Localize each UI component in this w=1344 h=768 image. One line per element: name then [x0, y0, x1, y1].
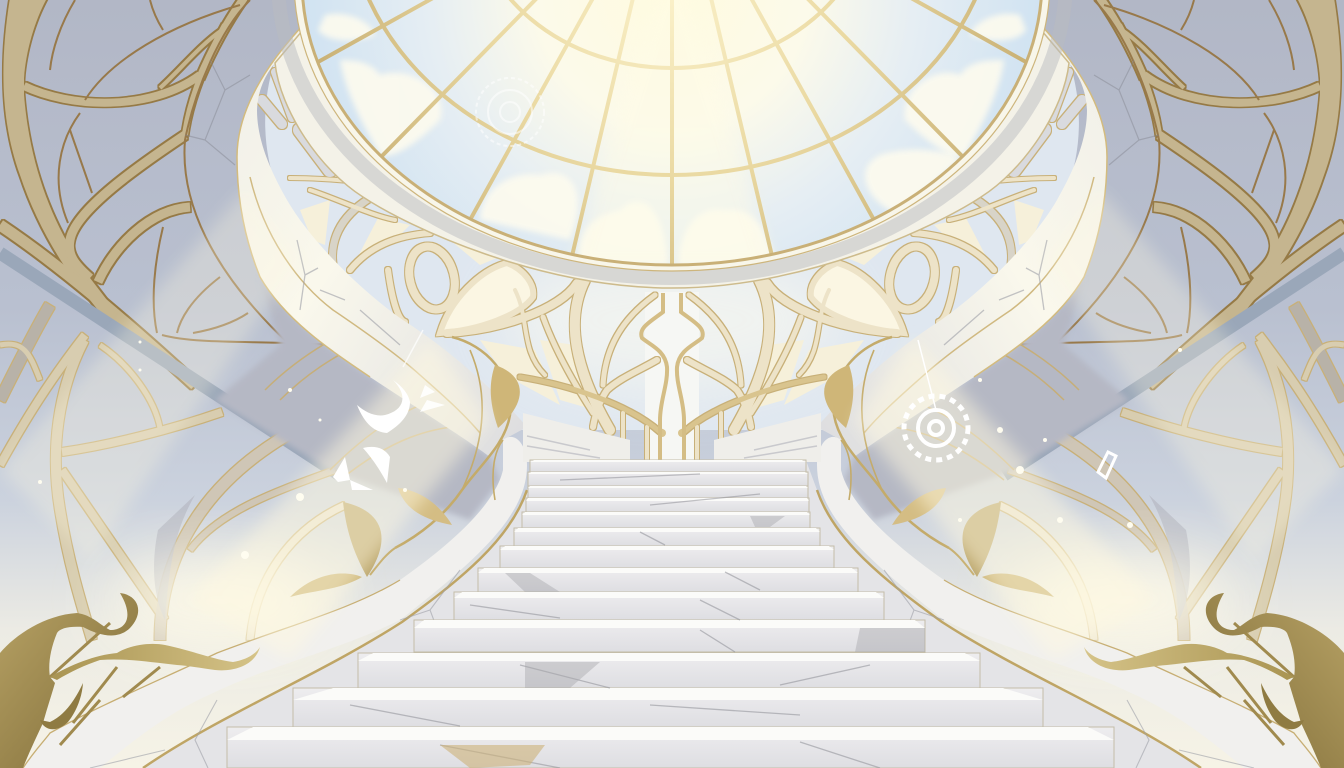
step risers	[227, 460, 1114, 768]
sparkles	[38, 340, 1182, 559]
step treads	[227, 460, 1114, 740]
darker marble patches	[505, 516, 925, 688]
dome light rays	[593, 193, 748, 264]
gold vein	[440, 745, 545, 768]
dome ring	[275, 0, 1069, 288]
dome ribs	[318, 0, 1026, 270]
faint dome rune	[476, 78, 544, 146]
dome frame	[302, 0, 1042, 265]
central stained window behind dome	[265, 60, 1079, 430]
wall tracery right	[999, 0, 1344, 645]
spiral band right	[804, 0, 1344, 768]
window tracery right	[677, 72, 1082, 460]
clouds	[318, 14, 1026, 265]
upper landing	[523, 413, 630, 462]
rune: crescent and glyphs left	[333, 330, 445, 490]
spiral band left	[0, 0, 540, 768]
marble veins on steps	[350, 474, 880, 768]
wall tracery left	[0, 0, 345, 645]
dome glass	[300, 0, 1044, 270]
rune: circle glyph right	[904, 340, 1116, 478]
window glow	[502, 250, 842, 390]
light beams	[0, 190, 1344, 660]
window tracery left	[262, 72, 667, 460]
central gate opening	[645, 292, 699, 460]
staircase	[227, 413, 1114, 768]
